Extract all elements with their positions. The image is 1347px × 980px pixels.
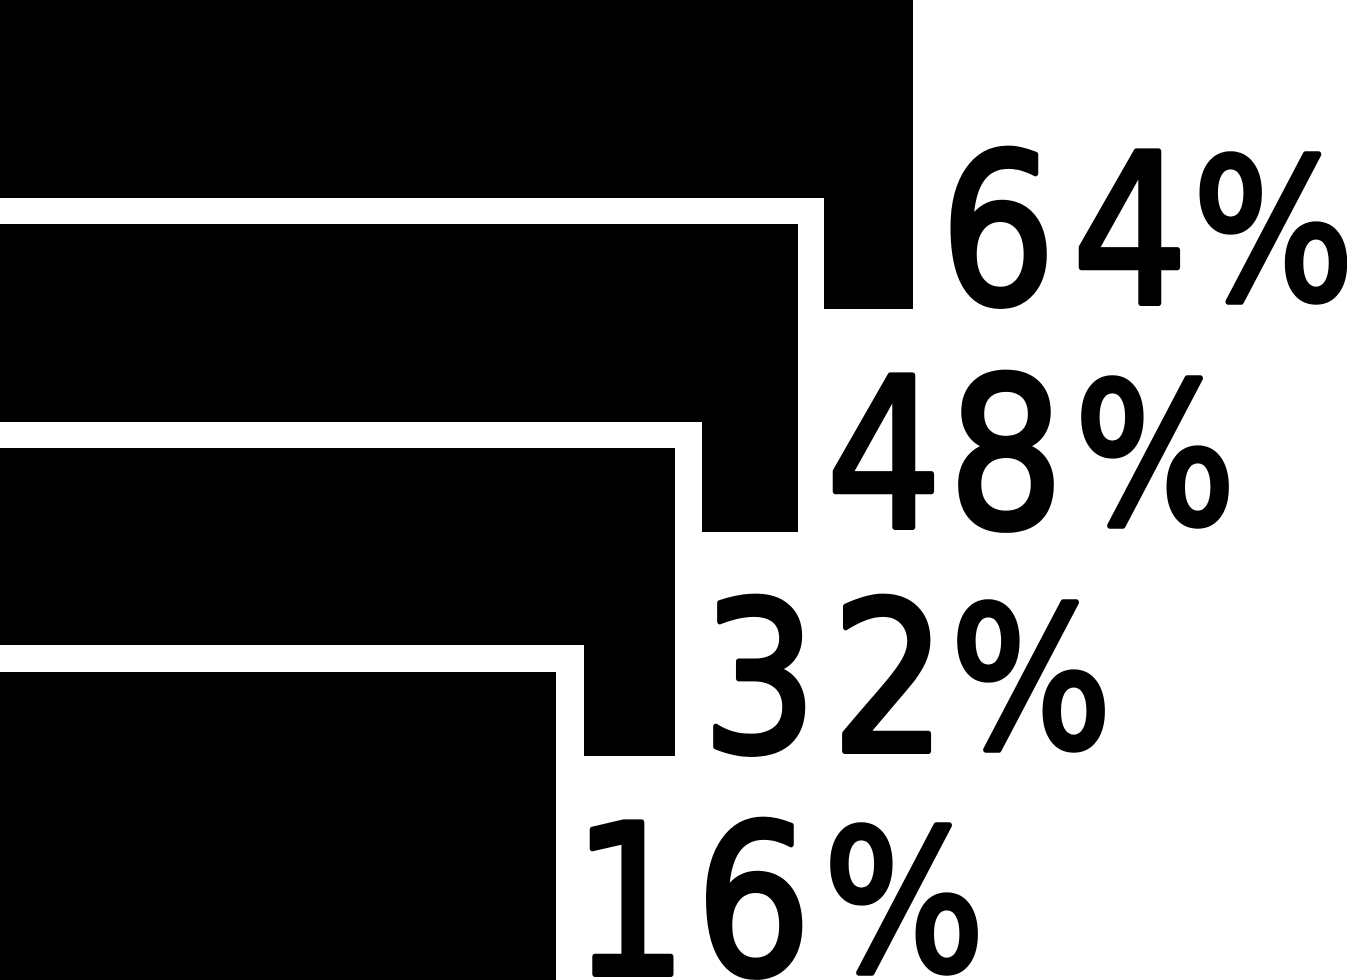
label: 64%	[940, 110, 1347, 352]
label: 48%: 48	[827, 334, 1064, 576]
bar: 64%	[0, 0, 913, 309]
label: 32%	[702, 558, 1112, 800]
bar: 48%	[0, 224, 798, 532]
label: 32%: 32	[702, 558, 947, 800]
label: 32%: %	[950, 567, 1112, 794]
label: 16%	[572, 781, 985, 980]
bar: 16%	[0, 672, 556, 980]
label: 48%	[826, 334, 1236, 576]
label: 48%: %	[1074, 343, 1236, 570]
bar: 32%	[0, 448, 675, 756]
label: 64%: 64	[940, 110, 1188, 352]
